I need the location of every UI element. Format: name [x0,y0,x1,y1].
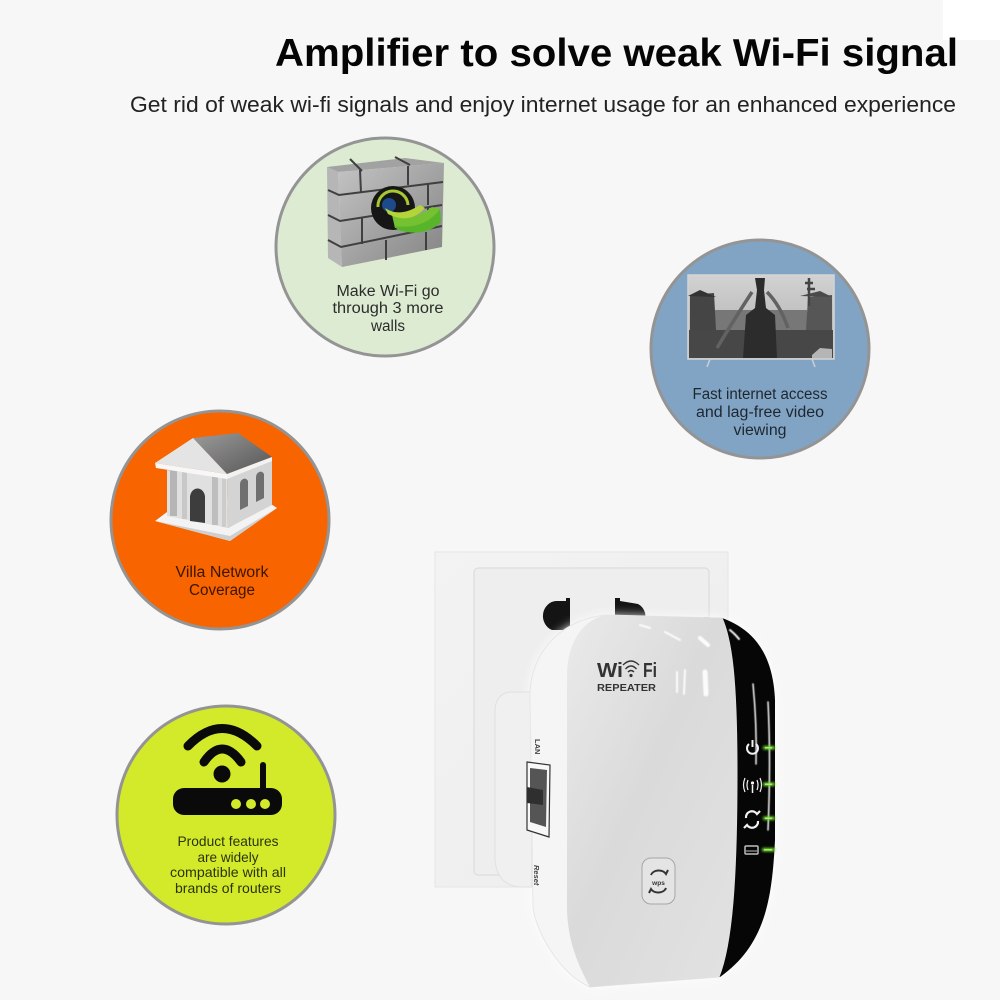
icon: villa [155,433,277,541]
white casing [530,615,737,987]
black side panel [700,617,775,977]
panel: routers [117,706,335,924]
reset label: Reset [532,865,541,886]
panel: villa [111,411,329,629]
WPS button: wps [651,880,665,887]
panel: walls [276,138,494,356]
label: video: viewing [734,422,786,439]
logo: Wi-Fi repeater: REPEATER [597,683,657,694]
indicator: LAN [745,846,775,854]
label: walls: walls [370,318,405,335]
label: routers [170,833,286,896]
label: routers: brands of routers [175,880,281,896]
indicator: sync [744,811,775,828]
label: routers: Product features [178,833,278,849]
grey front face [567,615,737,987]
label: villa: Coverage [189,582,255,599]
side highlights [730,630,770,830]
icon: television [688,275,834,367]
logo: Wi-Fi repeater: Wi [597,660,623,682]
subtitle: Get rid of weak wi-fi signals and enjoy internet usage for an enhanced experience [130,92,956,117]
logo: Wi-Fi repeater [597,660,657,694]
label: video [692,386,828,439]
device soft shadow [530,615,775,987]
signal hole [371,186,415,230]
logo: Wi-Fi repeater: Fi [643,660,657,682]
icon: router [173,728,282,815]
socket holes [543,598,570,630]
label: walls: Make Wi-Fi go [336,283,440,300]
front reflections [640,625,708,694]
icon: brick wall [327,157,444,267]
wi-fi repeater device [495,615,775,987]
indicator: power [747,740,775,754]
label: walls [332,283,444,335]
indicator: wireless [744,778,775,793]
label: villa [176,564,269,599]
LAN label: LAN [533,739,542,754]
WPS button [642,858,675,904]
white corner patch [943,0,1000,40]
plug body [495,692,532,887]
label: video: and lag-free video [696,404,824,421]
label: video: Fast internet access [692,386,828,403]
panel: video [651,240,869,458]
label: routers: are widely [198,849,258,865]
label: routers: compatible with all [170,864,286,880]
title: Amplifier to solve weak Wi-Fi signal [275,32,958,75]
label: walls: through 3 more [332,300,444,317]
wall socket [435,552,728,887]
label: villa: Villa Network [176,564,269,581]
LAN port [527,762,550,837]
